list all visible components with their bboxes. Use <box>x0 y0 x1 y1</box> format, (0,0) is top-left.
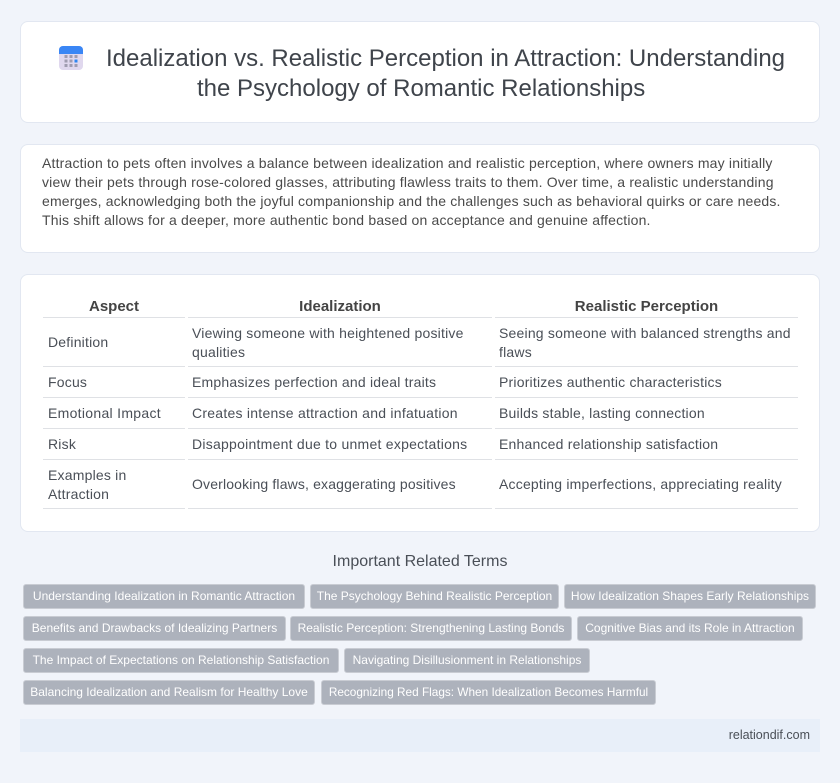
definition idealization: qualities <box>192 344 245 360</box>
header card <box>20 21 820 123</box>
intro text: Attraction to pets often involves a balance between idealization and realistic perception, where owners may initially <box>42 155 773 171</box>
tag <box>23 584 305 609</box>
examples realistic: Accepting imperfections, appreciating reality <box>499 476 782 492</box>
intro text <box>42 155 781 228</box>
intro text: emerges, acknowledging both the joyful companionship and the challenges such as behavioral quirks or care needs. <box>42 193 781 209</box>
row: Risk: Risk <box>48 436 76 452</box>
title: the Psychology of Romantic Relationships <box>197 75 645 102</box>
tag: Understanding Idealization in Romantic Attraction <box>33 589 295 603</box>
emotional realistic: Builds stable, lasting connection <box>499 405 705 421</box>
definition idealization <box>192 325 464 360</box>
focus realistic: Prioritizes authentic characteristics <box>499 374 722 390</box>
table header: Realistic Perception: Realistic Perception <box>575 298 718 315</box>
tag: Benefits and Drawbacks of Idealizing Partners <box>32 621 277 635</box>
tag: Balancing Idealization and Realism for Healthy Love <box>30 685 308 699</box>
tag: Navigating Disillusionment in Relationships <box>353 653 581 667</box>
comparison table card <box>20 274 820 532</box>
tag: The Impact of Expectations on Relationship Satisfaction <box>33 653 329 667</box>
tag: Recognizing Red Flags: When Idealization Becomes Harmful <box>329 685 648 699</box>
tag <box>564 584 816 609</box>
tag <box>577 616 803 641</box>
definition idealization: Viewing someone with heightened positive <box>192 325 464 341</box>
icon: calendar <box>59 46 83 70</box>
table header: Idealization: Idealization <box>299 298 381 315</box>
row: Examples in Attraction: Attraction <box>48 486 109 502</box>
row: Definition: Definition <box>48 334 108 350</box>
tag: The Psychology Behind Realistic Perception <box>317 589 552 603</box>
tag <box>344 648 590 673</box>
title <box>106 45 785 102</box>
tag: How Idealization Shapes Early Relationships <box>571 589 809 603</box>
tag <box>23 616 286 641</box>
definition realistic: flaws <box>499 344 532 360</box>
tag: Realistic Perception: Strengthening Lasting Bonds <box>298 621 564 635</box>
tag <box>321 680 656 705</box>
tag <box>290 616 572 641</box>
tag <box>23 648 339 673</box>
row: Emotional Impact: Emotional Impact <box>48 405 161 421</box>
tag <box>23 680 315 705</box>
risk realistic: Enhanced relationship satisfaction <box>499 436 718 452</box>
intro text: view their pets through rose-colored glasses, attributing flawless traits to them. Over time, a realistic understanding <box>42 174 774 190</box>
intro text: This shift allows for a deeper, more authentic bond based on acceptance and genuine affection. <box>42 212 651 228</box>
related terms tags <box>23 584 816 705</box>
tag <box>310 584 559 609</box>
examples idealization: Overlooking flaws, exaggerating positives <box>192 476 456 492</box>
focus idealization: Emphasizes perfection and ideal traits <box>192 374 436 390</box>
footer source: relationdif.com <box>729 728 810 742</box>
title: Idealization vs. Realistic Perception in Attraction: Understanding <box>106 45 785 72</box>
tag: Cognitive Bias and its Role in Attraction <box>585 621 795 635</box>
table header: Aspect: Aspect <box>89 298 139 315</box>
risk idealization: Disappointment due to unmet expectations <box>192 436 467 452</box>
row: Examples in Attraction <box>48 467 126 502</box>
related terms heading: Important Related Terms <box>333 553 507 570</box>
intro paragraph card <box>20 144 820 253</box>
emotional idealization: Creates intense attraction and infatuation <box>192 405 458 421</box>
definition realistic: Seeing someone with balanced strengths and <box>499 325 791 341</box>
row: Focus: Focus <box>48 374 87 390</box>
definition realistic <box>499 325 791 360</box>
footer bar <box>20 719 820 752</box>
row: Examples in Attraction: Examples in <box>48 467 126 483</box>
